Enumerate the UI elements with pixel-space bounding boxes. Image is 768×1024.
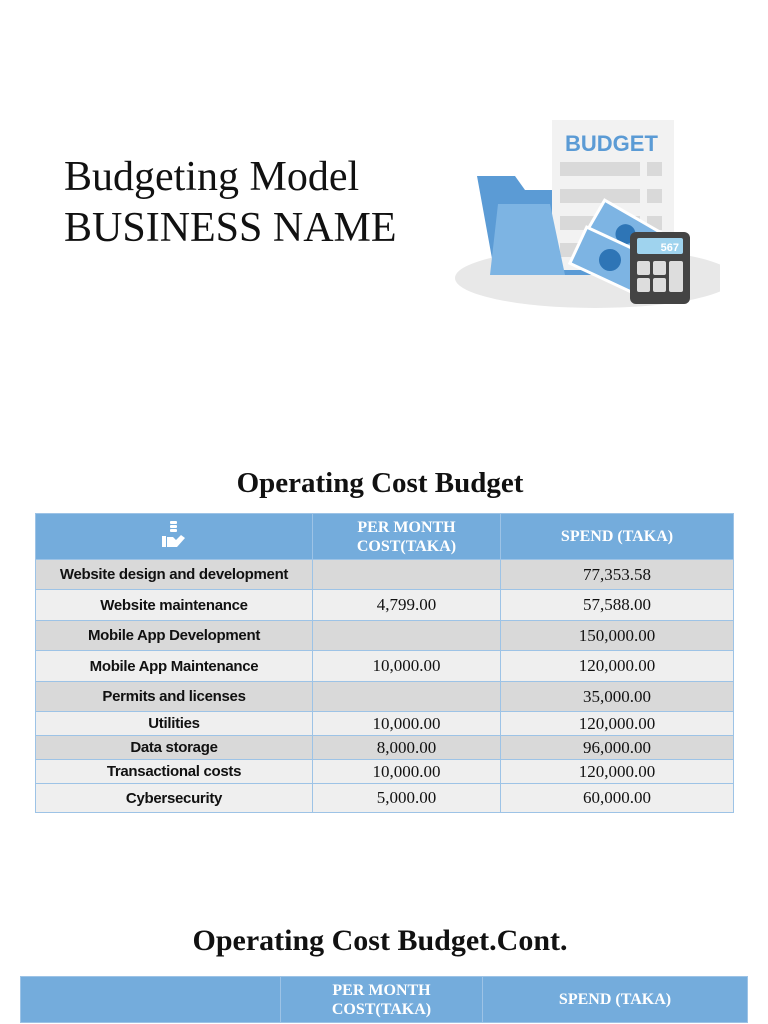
- icon: budget illustration: BUDGET: [565, 131, 658, 156]
- table: operating cost budget: COST(TAKA): [357, 538, 456, 554]
- table: operating cost budget: 10,000.00: [372, 714, 440, 732]
- heading: operating cost budget cont: Operating Cost Budget.Cont.: [192, 924, 568, 957]
- table: operating cost budget: 60,000.00: [583, 788, 651, 807]
- icon: budget illustration: [455, 120, 720, 308]
- table: operating cost budget cont header: PER MONTH: [332, 982, 431, 998]
- icon: budget illustration: 567: [661, 242, 679, 254]
- table: operating cost budget: Data storage: [130, 739, 218, 756]
- table: operating cost budget: 57,588.00: [583, 595, 651, 614]
- table: operating cost budget: 35,000.00: [583, 686, 651, 706]
- heading: operating cost budget: Operating Cost Budget: [237, 467, 523, 499]
- table: operating cost budget: Transactional costs: [107, 763, 241, 780]
- table: operating cost budget: Mobile App Development: [88, 627, 260, 644]
- table: operating cost budget cont header: SPEND (TAKA): [559, 991, 671, 1008]
- table: operating cost budget: Cybersecurity: [126, 790, 222, 806]
- table: operating cost budget cont header: COST(TAKA): [332, 1000, 431, 1018]
- table: operating cost budget cont header: [20, 976, 748, 1023]
- table: operating cost budget: Utilities: [148, 715, 200, 732]
- table: operating cost budget: 120,000.00: [579, 714, 655, 732]
- table: operating cost budget: 120,000.00: [579, 762, 655, 780]
- table: operating cost budget: 4,799.00: [377, 595, 436, 614]
- table: operating cost budget: Website design and development: [60, 566, 288, 583]
- table: operating cost budget: Permits and licenses: [102, 688, 246, 705]
- table: operating cost budget: Mobile App Maintenance: [90, 658, 258, 674]
- table: operating cost budget: Website maintenance: [100, 596, 248, 614]
- table: operating cost budget: 77,353.58: [583, 564, 651, 584]
- table: operating cost budget: 96,000.00: [583, 738, 651, 756]
- icon: hand with coins: [162, 521, 185, 547]
- table: operating cost budget: [35, 513, 734, 813]
- table: operating cost budget: 10,000.00: [372, 656, 440, 675]
- table: operating cost budget: PER MONTH: [357, 518, 456, 536]
- table: operating cost budget: 120,000.00: [579, 656, 655, 675]
- title: [64, 154, 397, 251]
- title: BUSINESS NAME: [64, 205, 397, 251]
- table: operating cost budget: 10,000.00: [372, 762, 440, 780]
- table: operating cost budget: 150,000.00: [579, 626, 655, 644]
- title: Budgeting Model: [64, 154, 359, 200]
- table: operating cost budget: 5,000.00: [377, 788, 436, 807]
- table: operating cost budget: 8,000.00: [377, 738, 436, 756]
- table: operating cost budget: SPEND (TAKA): [561, 528, 673, 545]
